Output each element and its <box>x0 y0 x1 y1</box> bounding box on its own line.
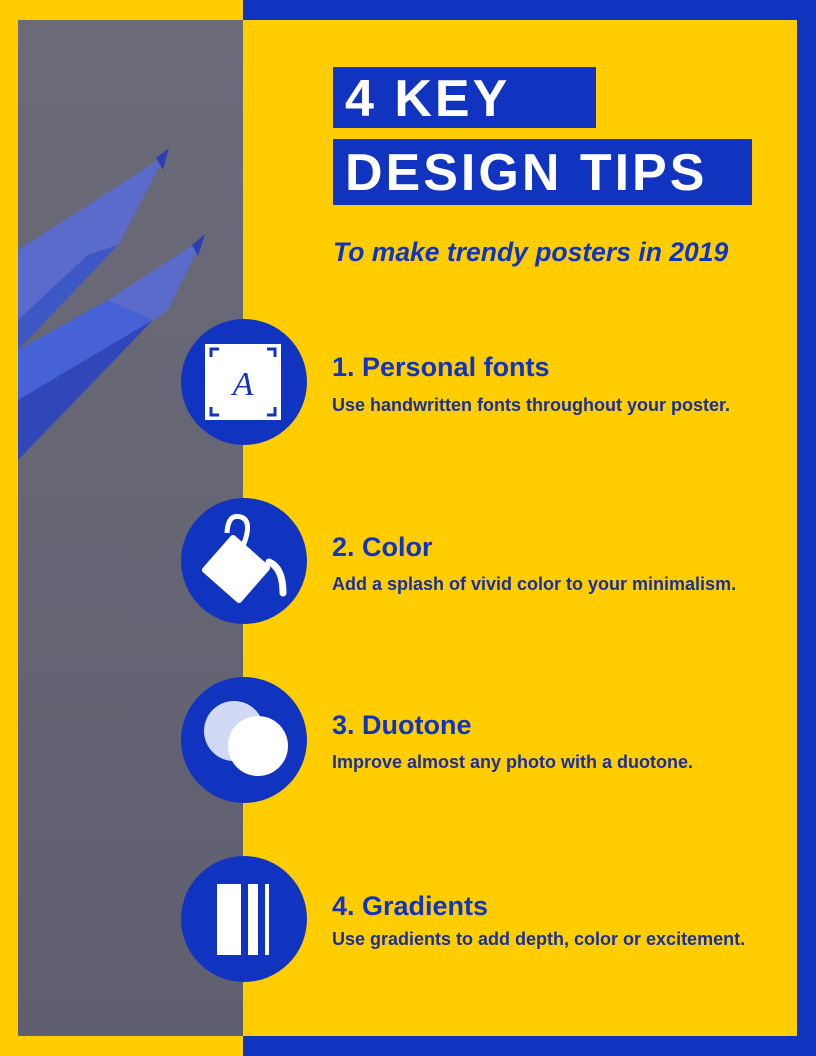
title: DESIGN TIPS <box>345 144 707 202</box>
icon: duotone <box>181 677 307 803</box>
yellow content area <box>243 20 797 1036</box>
title: 4 KEY <box>345 70 510 128</box>
tip 3 text: Improve almost any photo with a duotone. <box>332 752 693 772</box>
border: blue frame <box>243 0 816 1056</box>
title <box>333 67 752 205</box>
subtitle: To make trendy posters in 2019 <box>333 237 728 267</box>
icon: gradients <box>181 856 307 982</box>
tip 4 text: Use gradients to add depth, color or excitement. <box>332 929 745 949</box>
tip 2 text: Add a splash of vivid color to your minimalism. <box>332 574 736 594</box>
tip 2 heading: 2. Color <box>332 532 433 562</box>
tip 1 heading: 1. Personal fonts <box>332 352 550 382</box>
tip 4 heading: 4. Gradients <box>332 891 488 921</box>
tip 3 heading: 3. Duotone <box>332 710 472 740</box>
tip 1 text: Use handwritten fonts throughout your poster. <box>332 395 730 415</box>
icon: personal fonts <box>181 319 307 445</box>
photo panel: pencils <box>18 20 243 1036</box>
icon: paint bucket <box>181 498 307 624</box>
icon: personal fonts: A <box>231 366 254 403</box>
